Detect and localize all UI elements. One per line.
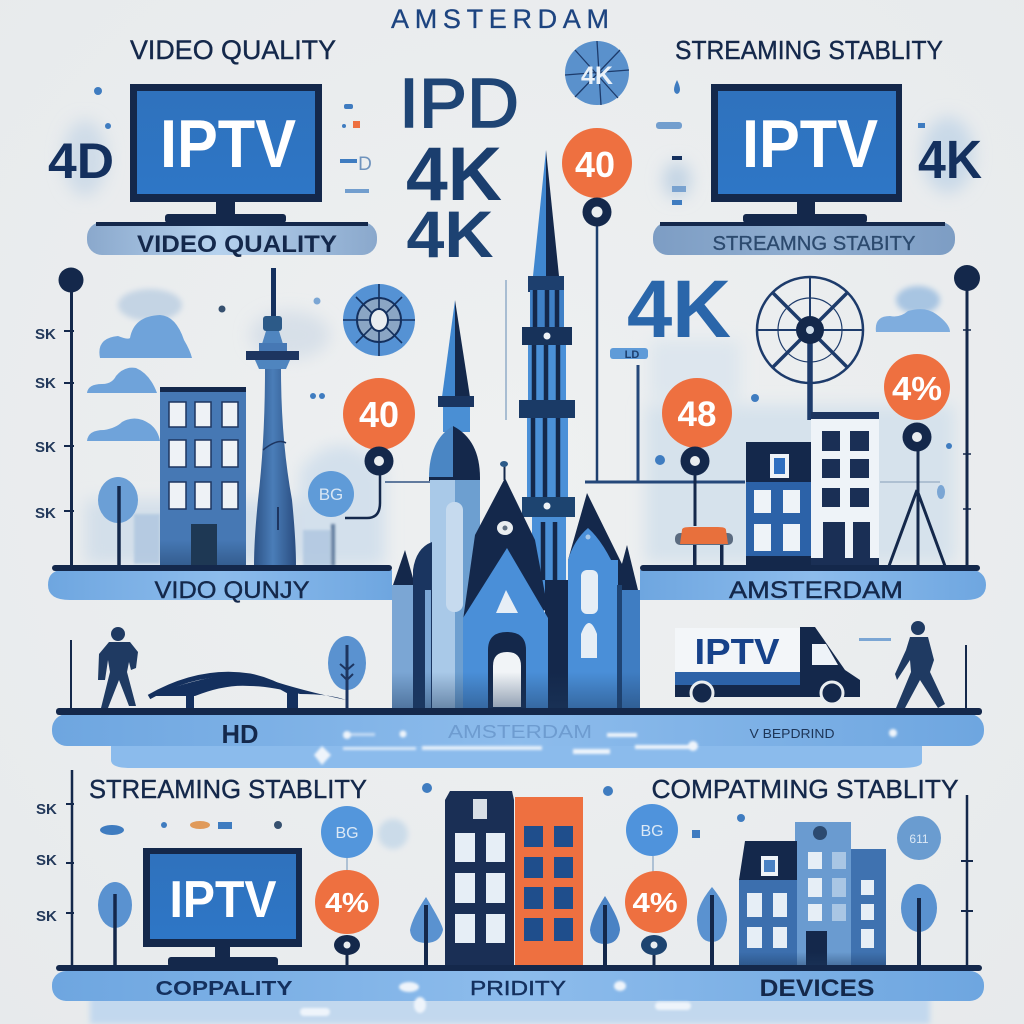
marker: orange 4% bottom left bbox=[315, 806, 379, 966]
band: row one right: AMSTERDAM bbox=[729, 577, 903, 604]
heading: compatibility stability bottom: COMPATMING STABLITY bbox=[652, 774, 958, 804]
blurred pale blocks bbox=[134, 514, 335, 566]
marker: orange 48 bbox=[662, 378, 732, 526]
label: 4D: 4D bbox=[48, 133, 114, 189]
church base shading bbox=[392, 672, 640, 708]
label: 4K: 4K bbox=[918, 130, 982, 190]
marker: orange 4% bottom left: 4% bbox=[325, 887, 369, 918]
band: row two: AMSTERDAM bbox=[448, 722, 592, 742]
left axis bottom bbox=[36, 770, 74, 966]
band: bottom: COPPALITY bbox=[156, 978, 293, 1000]
marker: orange 40 top: 40 bbox=[575, 144, 615, 185]
tree left bbox=[98, 477, 138, 566]
marker: orange 48: 48 bbox=[678, 395, 716, 434]
bridge bbox=[149, 674, 346, 708]
walking figure left bbox=[98, 627, 138, 708]
band: bottom: PRIDITY bbox=[470, 978, 566, 1000]
ground lines behind church bbox=[385, 280, 940, 482]
tree right of marker bbox=[697, 887, 727, 966]
left axis with scale labels: SK bbox=[35, 439, 56, 456]
panel: top right TV: IPTV bbox=[742, 106, 878, 182]
marker: orange 40 top bbox=[562, 128, 632, 483]
title: AMSTERDAM bbox=[391, 4, 609, 34]
band: row two: V BEPDRIND bbox=[750, 726, 834, 741]
right axis bbox=[954, 265, 980, 566]
tree small left bbox=[98, 882, 132, 966]
center heading stack: IPD bbox=[399, 64, 519, 142]
small dash near walker bbox=[859, 638, 891, 641]
marker: orange 4% on tripod: 4% bbox=[892, 370, 942, 407]
cloud right bbox=[876, 286, 950, 332]
buildings bottom right bbox=[739, 822, 886, 966]
left axis bottom: SK bbox=[36, 801, 57, 818]
left axis bottom: SK bbox=[36, 852, 57, 869]
panel: bottom TV bbox=[143, 848, 302, 967]
van bbox=[675, 627, 860, 704]
posts row two bbox=[71, 640, 966, 708]
left spire tower bbox=[429, 300, 480, 708]
panel: top left TV: IPTV bbox=[160, 106, 296, 182]
small sign: LD bbox=[625, 349, 639, 361]
marker: orange 40 left: BG bbox=[319, 485, 343, 504]
tower: TV tower bbox=[246, 268, 299, 566]
buildings center bottom bbox=[445, 791, 583, 966]
label: big 4K: 4K bbox=[627, 264, 731, 355]
panel: top left TV bbox=[48, 84, 377, 258]
marker: orange 4% bottom right: BG bbox=[640, 823, 664, 840]
panel: top right TV: STREAMNG STABITY bbox=[712, 233, 916, 255]
left axis with scale labels: SK bbox=[35, 326, 56, 343]
band: bottom bbox=[52, 965, 984, 1024]
tree mid bbox=[328, 636, 366, 708]
marker: orange 4% on tripod bbox=[884, 354, 950, 566]
icon: wind wheel bbox=[757, 277, 863, 420]
small orange bench bbox=[675, 527, 733, 566]
heading: video quality: VIDEO QUALITY bbox=[130, 35, 336, 65]
panel: top left TV: VIDEO QUALITY bbox=[137, 231, 337, 258]
tree mid-left bbox=[410, 897, 443, 966]
band: row two bbox=[52, 708, 984, 768]
marker: orange 4% bottom right bbox=[625, 804, 687, 966]
buildings right bbox=[746, 412, 879, 566]
main gable bbox=[463, 548, 548, 708]
panel: top right TV bbox=[653, 84, 982, 255]
band: row one left bbox=[48, 565, 392, 604]
small decorative marks top: D bbox=[358, 154, 372, 175]
van: IPTV bbox=[694, 631, 780, 672]
small sign bbox=[610, 348, 648, 361]
band: row one left: VIDO QUNJY bbox=[154, 577, 310, 604]
icon: globe 4K bbox=[565, 41, 629, 105]
band: row one right bbox=[640, 565, 986, 604]
panel: bottom TV: IPTV bbox=[170, 871, 277, 929]
walking figure right bbox=[895, 621, 945, 708]
right column and gable bbox=[545, 493, 640, 708]
left axis with scale labels: SK bbox=[35, 375, 56, 392]
icon: globe 4K: 4K bbox=[581, 62, 613, 90]
band: row two: HD bbox=[222, 719, 258, 749]
pale blob right of BG badge bbox=[378, 819, 408, 849]
center heading stack bbox=[399, 64, 519, 271]
right tall spire bbox=[519, 150, 575, 607]
left axis with scale labels bbox=[35, 268, 84, 566]
tree and badge far right: 611 bbox=[909, 832, 929, 846]
marker: orange 4% bottom right: 4% bbox=[632, 887, 678, 918]
left axis bottom: SK bbox=[36, 908, 57, 925]
marker: orange 40 left bbox=[308, 378, 415, 518]
building: left blue office bbox=[160, 387, 246, 566]
center church bbox=[392, 150, 640, 708]
marker: orange 4% bottom left: BG bbox=[335, 825, 359, 842]
marker: orange 40 left: 40 bbox=[359, 394, 399, 435]
center heading stack: 4K bbox=[406, 132, 502, 217]
tree mid-right bbox=[590, 896, 620, 966]
middle dark gable bbox=[463, 461, 548, 620]
right axis bottom bbox=[961, 795, 973, 966]
band: bottom: DEVICES bbox=[760, 975, 874, 1002]
left axis with scale labels: SK bbox=[35, 505, 56, 522]
tree and badge far right bbox=[897, 816, 941, 966]
heading: streaming stability bottom: STREAMING STABLITY bbox=[89, 774, 367, 804]
icon: target compass bbox=[343, 284, 415, 356]
clouds left bbox=[87, 289, 192, 441]
center heading stack: 4K bbox=[406, 197, 494, 271]
small decorative marks top bbox=[94, 80, 952, 838]
heading: streaming stability: STREAMING STABLITY bbox=[675, 35, 943, 65]
far left wing bbox=[392, 542, 432, 708]
